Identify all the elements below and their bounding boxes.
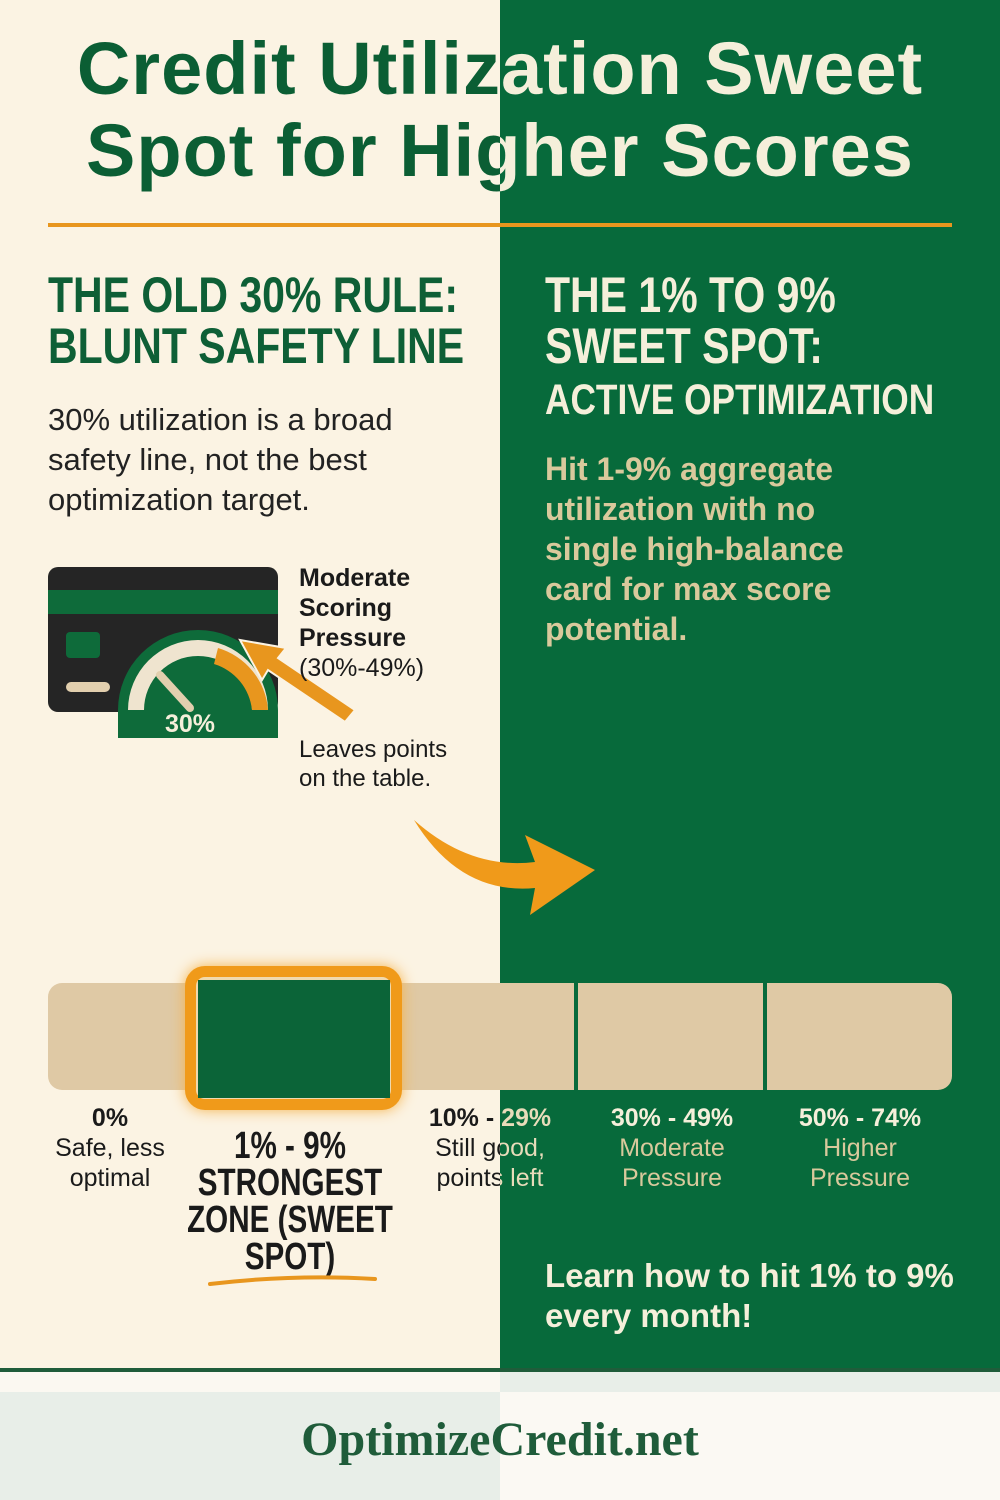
arrow: curved orange bbox=[414, 820, 595, 915]
label: 0%: Safe, less bbox=[55, 1134, 165, 1162]
label: 50-74% bbox=[799, 1104, 921, 1192]
text block: right body: single high-balance bbox=[545, 531, 844, 567]
heading: sweet spot: SWEET SPOT: bbox=[545, 318, 823, 374]
footer bbox=[0, 1368, 1000, 1500]
underline swoosh bbox=[208, 1275, 377, 1286]
label: 1-9% sweet spot: ZONE (SWEET bbox=[187, 1199, 393, 1241]
heading: old 30% rule: BLUNT SAFETY LINE bbox=[48, 318, 464, 374]
label: 1-9% sweet spot: SPOT) bbox=[245, 1236, 335, 1278]
title bbox=[0, 28, 1000, 192]
text block: right body bbox=[545, 451, 844, 647]
label: 10-29%: points left bbox=[436, 1164, 544, 1192]
text block: left body: safety line, not the best bbox=[48, 442, 367, 477]
label: 30-49%: Pressure bbox=[622, 1164, 722, 1192]
highlight: sweet spot segment bbox=[185, 966, 402, 1110]
icon: credit card with gauge: 30% bbox=[165, 710, 215, 738]
text block: left body bbox=[48, 402, 393, 517]
text block: right body: utilization with no bbox=[545, 491, 815, 527]
label: 1-9% sweet spot bbox=[187, 1125, 393, 1278]
panel: left cream background bbox=[0, 0, 500, 1370]
label: 50-74%: Higher bbox=[823, 1134, 897, 1162]
label: 30-49% bbox=[611, 1104, 733, 1192]
label: 50-74%: Pressure bbox=[810, 1164, 910, 1192]
callout: leaves points bbox=[299, 736, 447, 792]
heading: old 30% rule bbox=[48, 267, 464, 374]
callout: CTA: every month! bbox=[545, 1297, 752, 1334]
label: 1-9% sweet spot: 1% - 9% bbox=[234, 1125, 346, 1167]
callout: moderate scoring pressure: (30%-49%) bbox=[299, 654, 424, 682]
title: Spot for Higher Scores bbox=[86, 109, 914, 192]
label: 0% bbox=[55, 1104, 165, 1192]
bar chart: utilization scale bbox=[48, 955, 952, 1121]
heading: sweet spot bbox=[545, 267, 934, 424]
text block: left body: 30% utilization is a broad bbox=[48, 402, 393, 437]
footer brand text: OptimizeCredit.net bbox=[301, 1413, 699, 1466]
heading: sweet spot: ACTIVE OPTIMIZATION bbox=[545, 376, 934, 424]
label: 30-49%: 30% - 49% bbox=[611, 1104, 733, 1132]
panel: right green background bbox=[500, 0, 1000, 1370]
label: 1-9% sweet spot: STRONGEST bbox=[198, 1162, 382, 1204]
text block: right body: potential. bbox=[545, 611, 687, 647]
callout: moderate scoring pressure bbox=[299, 564, 424, 682]
callout: moderate scoring pressure: Moderate bbox=[299, 564, 410, 592]
divider line orange bbox=[48, 223, 952, 227]
text block: right body: card for max score bbox=[545, 571, 831, 607]
label: 10-29% bbox=[380, 1103, 600, 1193]
callout: CTA: Learn how to hit 1% to 9% bbox=[545, 1257, 954, 1294]
label: 10-29%: Still good, bbox=[435, 1134, 545, 1162]
label: 50-74%: 50% - 74% bbox=[799, 1104, 921, 1132]
heading: sweet spot: THE 1% TO 9% bbox=[545, 267, 836, 323]
callout: CTA bbox=[545, 1257, 954, 1334]
icon: credit card with gauge bbox=[48, 567, 354, 738]
heading: old 30% rule: THE OLD 30% RULE: bbox=[48, 267, 458, 323]
label: 0%: 0% bbox=[92, 1104, 128, 1132]
title: Credit Utilization Sweet bbox=[77, 27, 923, 110]
label: 30-49%: Moderate bbox=[619, 1134, 725, 1162]
label: 0%: optimal bbox=[70, 1164, 150, 1192]
callout: moderate scoring pressure: Pressure bbox=[299, 624, 406, 652]
callout: moderate scoring pressure: Scoring bbox=[299, 594, 392, 622]
callout: leaves points: on the table. bbox=[299, 765, 431, 792]
text block: right body: Hit 1-9% aggregate bbox=[545, 451, 833, 487]
callout: leaves points: Leaves points bbox=[299, 736, 447, 763]
text block: left body: optimization target. bbox=[48, 482, 310, 517]
